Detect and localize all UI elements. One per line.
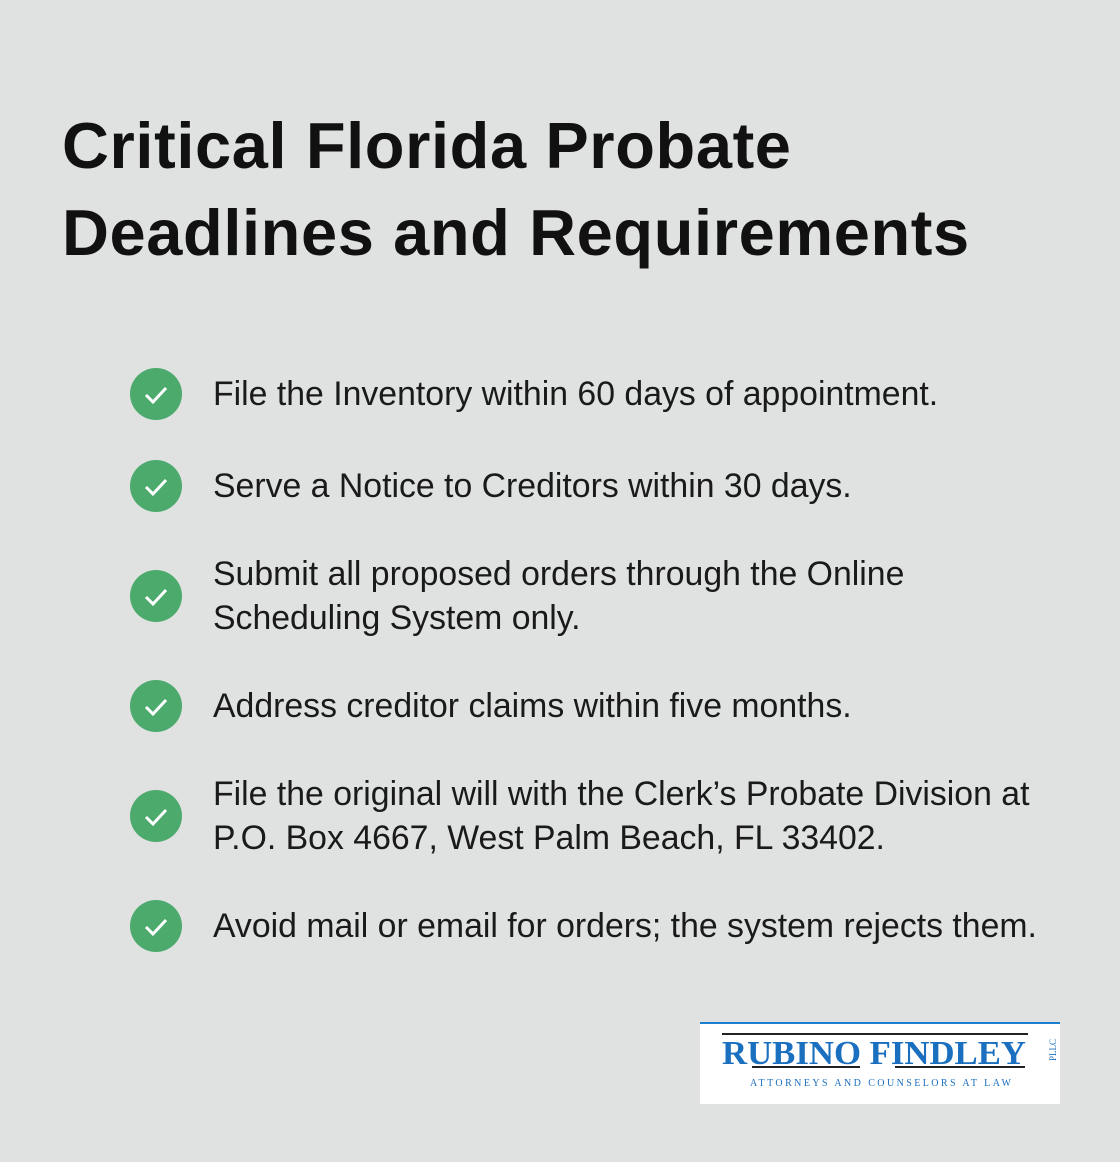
- logo: [700, 1022, 1060, 1104]
- text: File the original will with the Clerk’s Probate Division at: [213, 775, 1029, 813]
- logo: RUBINO FINDLEY: [722, 1035, 1026, 1072]
- title: Deadlines and Requirements: [62, 196, 970, 269]
- icon: check: [130, 790, 182, 842]
- item 6: [130, 900, 1037, 952]
- item 5: [130, 775, 1030, 857]
- logo: PLLC: [1048, 1039, 1058, 1061]
- text: Submit all proposed orders through the Online: [213, 555, 904, 593]
- text: [213, 775, 1030, 857]
- icon: check: [130, 900, 182, 952]
- text: Address creditor claims within five months.: [213, 687, 852, 725]
- text: Scheduling System only.: [213, 599, 581, 637]
- item 3: [130, 555, 904, 637]
- text: [213, 555, 904, 637]
- text: Serve a Notice to Creditors within 30 days.: [213, 467, 852, 505]
- item 1: [130, 368, 938, 420]
- icon: check: [130, 680, 182, 732]
- item 4: [130, 680, 852, 732]
- text: Avoid mail or email for orders; the system rejects them.: [213, 907, 1037, 945]
- logo: ATTORNEYS AND COUNSELORS AT LAW: [750, 1078, 1012, 1089]
- text: P.O. Box 4667, West Palm Beach, FL 33402.: [213, 819, 885, 857]
- icon: check: [130, 460, 182, 512]
- title: [62, 109, 970, 269]
- title: Critical Florida Probate: [62, 109, 792, 182]
- icon: check: [130, 368, 182, 420]
- text: File the Inventory within 60 days of appointment.: [213, 375, 938, 413]
- item 2: [130, 460, 852, 512]
- icon: check: [130, 570, 182, 622]
